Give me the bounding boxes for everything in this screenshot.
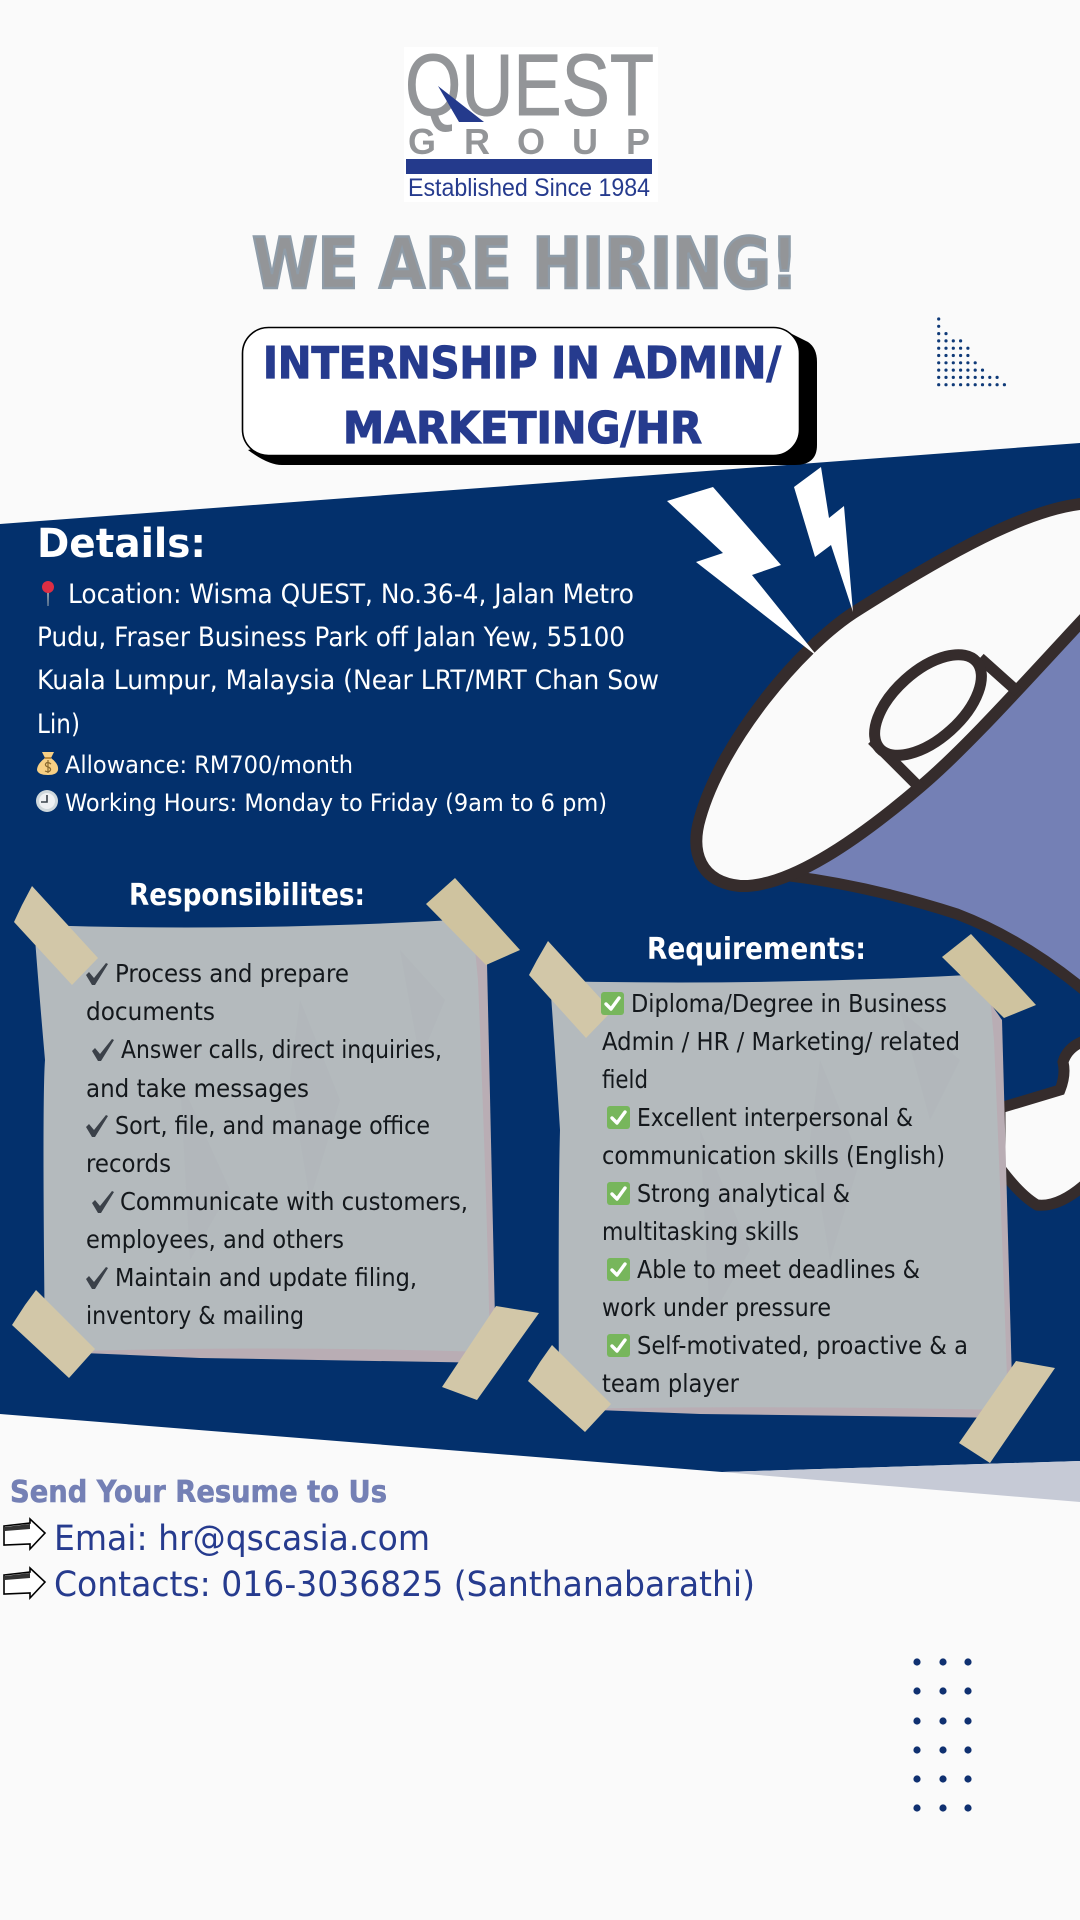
details heading: Details:	[37, 521, 206, 567]
checklist: Process and prepare	[115, 959, 349, 988]
checklist: field	[602, 1065, 648, 1094]
contact heading: Send Your Resume to Us	[10, 1475, 387, 1510]
decorative dot grid	[913, 1658, 972, 1812]
position badge: INTERNSHIP IN ADMIN/	[263, 338, 782, 389]
checklist: Admin / HR / Marketing/ related	[602, 1027, 960, 1056]
allowance text: Allowance: RM700/month	[65, 751, 353, 779]
position badge	[242, 328, 817, 465]
paper creases	[180, 950, 445, 1260]
panel: responsibilities	[12, 878, 539, 1400]
megaphone horn	[790, 600, 1080, 995]
position badge: MARKETING/HR	[343, 403, 702, 454]
checklist: Excellent interpersonal &	[637, 1103, 913, 1132]
checklist: Able to meet deadlines &	[637, 1255, 920, 1284]
checklist	[601, 989, 968, 1398]
logo: Quest Group: Established Since 1984	[408, 174, 650, 202]
location text: Location: Wisma QUEST, No.36-4, Jalan Metro	[68, 579, 634, 610]
checklist: documents	[86, 997, 215, 1026]
checklist: and take messages	[86, 1074, 309, 1103]
tape corners	[528, 934, 1055, 1463]
checklist: Communicate with customers,	[120, 1187, 468, 1216]
paper sheet	[34, 919, 490, 1352]
checklist: communication skills (English)	[602, 1141, 945, 1170]
details section	[36, 521, 659, 817]
lightning bolt left	[667, 487, 818, 657]
icon: arrow email	[4, 1519, 45, 1549]
megaphone handle	[1000, 1039, 1080, 1205]
icon: money bag	[37, 752, 58, 775]
title: WE ARE HIRING!	[252, 223, 798, 305]
location text	[37, 579, 659, 740]
navy panel	[0, 443, 1080, 1472]
megaphone bell	[696, 503, 1080, 886]
requirements heading: Requirements:	[647, 932, 866, 967]
checklist: Maintain and update filing,	[115, 1263, 417, 1292]
megaphone inner ellipse	[857, 636, 999, 774]
checklist	[86, 959, 468, 1330]
working hours text: Working Hours: Monday to Friday (9am to 6 pm)	[65, 789, 607, 817]
location text: Kuala Lumpur, Malaysia (Near LRT/MRT Chan Sow	[37, 665, 659, 696]
paper backing	[570, 1000, 1013, 1418]
checklist: Self-motivated, proactive & a	[637, 1331, 968, 1360]
location text: Lin)	[37, 709, 80, 740]
checklist: Answer calls, direct inquiries,	[121, 1035, 442, 1064]
checklist: work under pressure	[602, 1293, 831, 1322]
email text: Emai: hr@qscasia.com	[54, 1519, 430, 1559]
checklist: Sort, file, and manage office	[115, 1111, 430, 1140]
checklist: Strong analytical &	[637, 1179, 850, 1208]
contact section	[4, 1475, 755, 1605]
logo: Quest Group: GROUP	[408, 121, 650, 162]
checklist: inventory & mailing	[86, 1301, 304, 1330]
decorative halftone triangle	[939, 319, 1004, 385]
checklist: records	[86, 1149, 171, 1178]
lightning bolt right	[794, 467, 853, 612]
checklist: Diploma/Degree in Business	[631, 989, 947, 1018]
tape corners	[12, 878, 539, 1400]
paper sheet	[550, 974, 1008, 1410]
checklist: multitasking skills	[602, 1217, 799, 1246]
responsibilities heading: Responsibilites:	[129, 878, 365, 913]
icon: arrow phone	[4, 1568, 45, 1598]
checklist: employees, and others	[86, 1225, 344, 1254]
location text: Pudu, Fraser Business Park off Jalan Yew, 55100	[37, 622, 625, 653]
icon: clock	[36, 790, 58, 812]
megaphone illustration	[667, 467, 1080, 1205]
icon: location pin	[42, 581, 54, 606]
contacts text: Contacts: 016-3036825 (Santhanabarathi)	[54, 1565, 755, 1605]
logo: Quest Group: QUEST	[405, 37, 654, 134]
logo: Quest Group	[404, 37, 658, 202]
panel: requirements	[528, 932, 1055, 1463]
checklist: team player	[602, 1369, 740, 1398]
paper creases	[700, 1010, 960, 1320]
megaphone neck lines	[872, 658, 1018, 788]
footer grey wedge	[722, 1461, 1080, 1502]
paper backing	[60, 940, 496, 1363]
